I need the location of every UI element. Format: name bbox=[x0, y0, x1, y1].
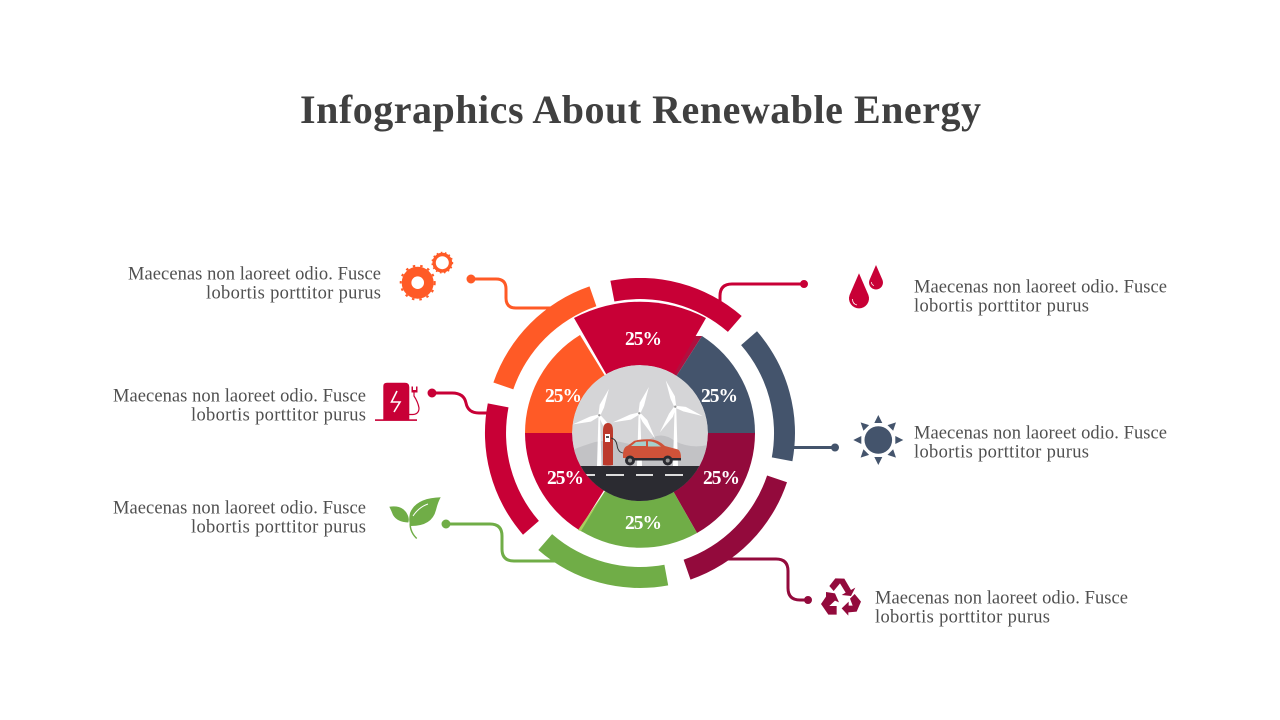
text: recycle: lobortis porttitor purus bbox=[875, 608, 1050, 628]
text: gears: Maecenas non laoreet odio. Fusce bbox=[128, 264, 381, 284]
percent labels: 25% bbox=[703, 468, 740, 489]
car bbox=[623, 439, 681, 466]
connector: maroon bbox=[720, 559, 810, 602]
slice: red top bbox=[574, 302, 706, 433]
hills bbox=[572, 435, 708, 470]
icon: sun bbox=[853, 415, 903, 465]
text: sun bbox=[914, 424, 1167, 462]
text: recycle bbox=[875, 588, 1128, 628]
title: Infographics About Renewable Energy bbox=[300, 87, 981, 132]
text: water: Maecenas non laoreet odio. Fusce bbox=[914, 278, 1167, 298]
percent labels: 25% bbox=[625, 513, 662, 534]
sliver: dark red bbox=[640, 336, 702, 433]
icon: recycle bbox=[821, 578, 861, 616]
percent labels: 25% bbox=[547, 468, 584, 489]
text: charger: Maecenas non laoreet odio. Fusce bbox=[113, 386, 366, 406]
center illustration bbox=[570, 365, 710, 506]
text: leaves bbox=[113, 498, 366, 538]
charging pump bbox=[603, 423, 624, 466]
text: water bbox=[914, 278, 1167, 316]
sky bbox=[572, 365, 708, 501]
slice: blue bbox=[640, 336, 755, 433]
text: charger: lobortis porttitor purus bbox=[191, 406, 366, 426]
text: water: lobortis porttitor purus bbox=[914, 296, 1089, 316]
ring arc: red left bbox=[485, 403, 539, 535]
text: sun: Maecenas non laoreet odio. Fusce bbox=[914, 424, 1167, 444]
percent labels: 25% bbox=[545, 386, 582, 407]
text: recycle: Maecenas non laoreet odio. Fusce bbox=[875, 588, 1128, 608]
infographic bbox=[114, 94, 1166, 626]
percent labels: 25% bbox=[625, 329, 662, 350]
slice: orange bbox=[525, 335, 640, 433]
icon: gears bbox=[401, 253, 452, 300]
slice: red lower left bbox=[525, 433, 640, 530]
sliver: light green bbox=[578, 490, 606, 532]
ring arc: blue bbox=[741, 331, 795, 461]
turbines bbox=[572, 379, 704, 466]
slice: green bbox=[581, 433, 697, 548]
percent labels: 25% bbox=[701, 386, 738, 407]
ring arc: orange bbox=[493, 286, 596, 389]
icon: EV charger bbox=[375, 383, 419, 421]
connector: orange bbox=[468, 276, 552, 308]
road dashes bbox=[585, 474, 683, 476]
ring arc: green bbox=[538, 534, 668, 588]
pie chart bbox=[525, 302, 755, 548]
icon: water drops bbox=[849, 265, 883, 308]
connector: green bbox=[443, 521, 556, 561]
text: leaves: lobortis porttitor purus bbox=[191, 518, 366, 538]
percent labels bbox=[545, 329, 740, 534]
ring arc: maroon bbox=[684, 476, 787, 580]
text: sun: lobortis porttitor purus bbox=[914, 442, 1089, 462]
connector: red left bbox=[429, 390, 490, 413]
ring arc: red top bbox=[610, 278, 742, 332]
connector: blue bbox=[790, 445, 838, 450]
slice: maroon bbox=[640, 433, 755, 533]
connector: red right bbox=[720, 282, 806, 304]
text: gears bbox=[128, 264, 381, 304]
text: leaves: Maecenas non laoreet odio. Fusce bbox=[113, 498, 366, 518]
text: gears: lobortis porttitor purus bbox=[206, 284, 381, 304]
outer ring bbox=[485, 278, 795, 588]
text: charger bbox=[113, 386, 366, 426]
road bbox=[580, 466, 700, 501]
icon: leaves bbox=[389, 497, 441, 538]
